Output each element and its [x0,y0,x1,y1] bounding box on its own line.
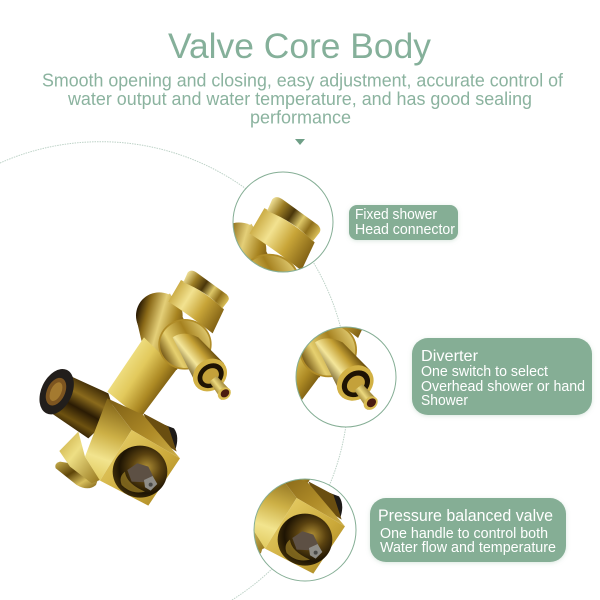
detail circle: pressure balanced valve [254,478,356,582]
callout: fixed shower head connector [349,205,458,240]
callout: diverter: One switch to select [421,364,548,380]
callout: fixed shower head connector: Fixed shower [355,207,437,223]
callout: fixed shower head connector: Head connector [355,222,455,238]
subtitle text block: Smooth opening and closing, easy adjustment, accurate control of [42,70,564,90]
callout: diverter [412,338,592,415]
subtitle text block [42,70,564,128]
title: Valve Core Body [168,27,431,66]
icon: down arrow [295,139,305,145]
main valve illustration [33,271,234,506]
subtitle text block: water output and water temperature, and has good sealing [67,89,532,109]
detail circle: diverter [296,326,396,428]
callout: pressure balanced valve: Pressure balanced valve [378,507,553,525]
callout: pressure balanced valve: Water flow and temperature [380,540,556,556]
callout: pressure balanced valve [370,498,566,562]
callout: diverter: Diverter [421,348,479,365]
subtitle text block: performance [250,108,351,128]
guide arc linking the callouts [0,142,349,600]
detail circle: fixed shower head connector [232,172,334,272]
callout: diverter: Overhead shower or hand [421,379,585,395]
callout: diverter: Shower [421,393,468,409]
callout: pressure balanced valve: One handle to control both [380,526,548,542]
